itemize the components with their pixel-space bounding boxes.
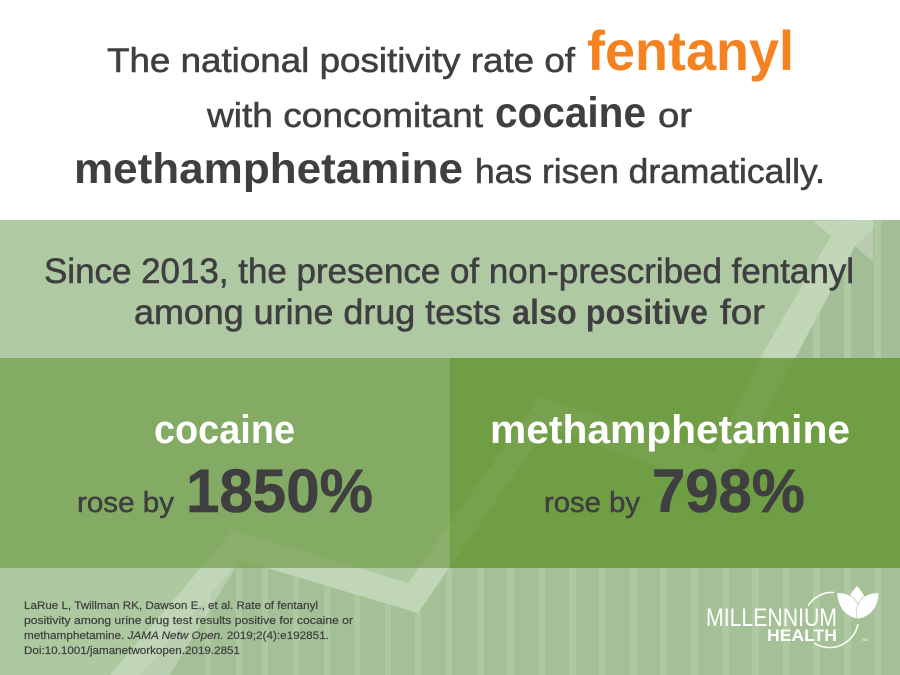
citation: methamphetamine. JAMA Netw Open. 2019;2(4):e192851. bbox=[24, 630, 329, 642]
citation bbox=[24, 600, 353, 657]
chart: background bars beneath rising arrow bbox=[170, 220, 900, 675]
statistic: methamphetamine: 798% bbox=[652, 457, 805, 525]
title: with concomitant bbox=[206, 97, 484, 135]
title: cocaine bbox=[495, 89, 646, 137]
statistic: methamphetamine: methamphetamine bbox=[490, 408, 850, 452]
citation: Doi:10.1001/jamanetworkopen.2019.2851 bbox=[24, 645, 240, 657]
title: methamphetamine bbox=[74, 145, 463, 193]
intro text: for bbox=[720, 293, 765, 332]
logo: Millennium Health: MILLENNIUM bbox=[706, 604, 837, 632]
title: The national positivity rate of bbox=[107, 42, 576, 80]
statistic: cocaine bbox=[77, 408, 373, 525]
panel: cocaine statistic background bbox=[0, 358, 450, 568]
logo: Millennium Health bbox=[706, 586, 879, 648]
title: or bbox=[658, 97, 692, 135]
logo: Millennium Health: HEALTH bbox=[767, 627, 837, 645]
intro text: also positive bbox=[512, 293, 708, 332]
panel: light green footer band bbox=[0, 568, 900, 675]
intro text: among urine drug tests bbox=[134, 293, 501, 332]
citation: LaRue L, Twillman RK, Dawson E., et al. Rate of fentanyl bbox=[24, 600, 318, 612]
title bbox=[74, 19, 825, 193]
citation: positivity among urine drug test results positive for cocaine or bbox=[24, 615, 353, 627]
statistic: cocaine: cocaine bbox=[154, 408, 295, 452]
statistic: cocaine: rose by bbox=[77, 487, 174, 519]
title: has risen dramatically. bbox=[475, 153, 825, 191]
panel: methamphetamine statistic background bbox=[450, 358, 900, 568]
arrow: rising trend line bbox=[110, 220, 873, 675]
panel: white title background bbox=[0, 0, 900, 220]
title: fentanyl bbox=[587, 19, 794, 82]
statistic: cocaine: 1850% bbox=[186, 457, 373, 525]
logo: Millennium Health: SM bbox=[862, 637, 868, 642]
statistic: methamphetamine: rose by bbox=[544, 487, 640, 519]
statistic: methamphetamine bbox=[490, 408, 850, 525]
panel: light green intro band bbox=[0, 220, 900, 358]
intro text: Since 2013, the presence of non-prescribed fentanyl bbox=[44, 252, 854, 291]
intro text bbox=[44, 252, 854, 332]
